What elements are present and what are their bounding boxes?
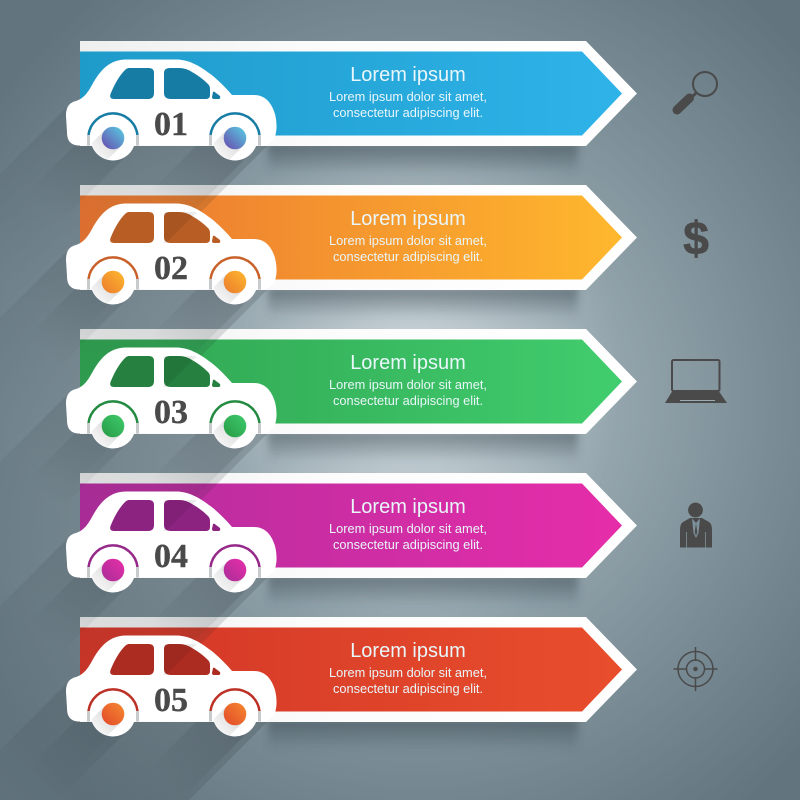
car 03 [66,348,277,448]
car 04: 04 [154,538,188,575]
panel: banner 01 [0,41,637,356]
wheel: front [212,692,258,736]
wheel: front [212,548,258,592]
car 03: 03 [154,394,188,431]
wheel: rear [90,404,136,448]
panel: banner 01: consectetur adipiscing elit. [333,105,483,120]
wheel: front [212,116,258,160]
icon: target [674,647,718,691]
car 02: 02 [154,250,188,287]
panel: banner 04 [0,473,637,788]
panel: banner 02 [0,185,637,500]
panel: banner 05 [0,617,637,800]
car 04 [66,492,277,592]
icon: dollar sign: $ [683,212,709,264]
panel: banner 01: Lorem ipsum [350,64,466,86]
car 05 [66,636,277,736]
panel: banner 02: consectetur adipiscing elit. [333,249,483,264]
wheel: rear [90,260,136,304]
car 01: 01 [154,106,188,143]
background highlight [200,80,620,660]
panel: banner 03: Lorem ipsum dolor sit amet, [329,377,487,392]
panel: banner 05: Lorem ipsum [350,640,466,662]
wheel: front [212,260,258,304]
car 05: 05 [154,682,188,719]
panel: banner 01: Lorem ipsum dolor sit amet, [329,89,487,104]
panel: banner 03: consectetur adipiscing elit. [333,393,483,408]
panel: banner 04: Lorem ipsum [350,496,466,518]
wheel: rear [90,116,136,160]
panel: banner 03: Lorem ipsum [350,352,466,374]
panel: banner 04: consectetur adipiscing elit. [333,537,483,552]
panel: banner 03 [0,329,637,644]
panel: banner 05: consectetur adipiscing elit. [333,681,483,696]
icon: magnifying glass [677,72,717,110]
panel: banner 05: Lorem ipsum dolor sit amet, [329,665,487,680]
wheel: rear [90,548,136,592]
car 02 [66,204,277,304]
icon: businessman [680,503,712,548]
car 01 [66,60,277,160]
wheel: rear [90,692,136,736]
wheel: front [212,404,258,448]
icon: laptop [665,360,727,403]
panel: banner 04: Lorem ipsum dolor sit amet, [329,521,487,536]
panel: banner 02: Lorem ipsum [350,208,466,230]
panel: banner 02: Lorem ipsum dolor sit amet, [329,233,487,248]
